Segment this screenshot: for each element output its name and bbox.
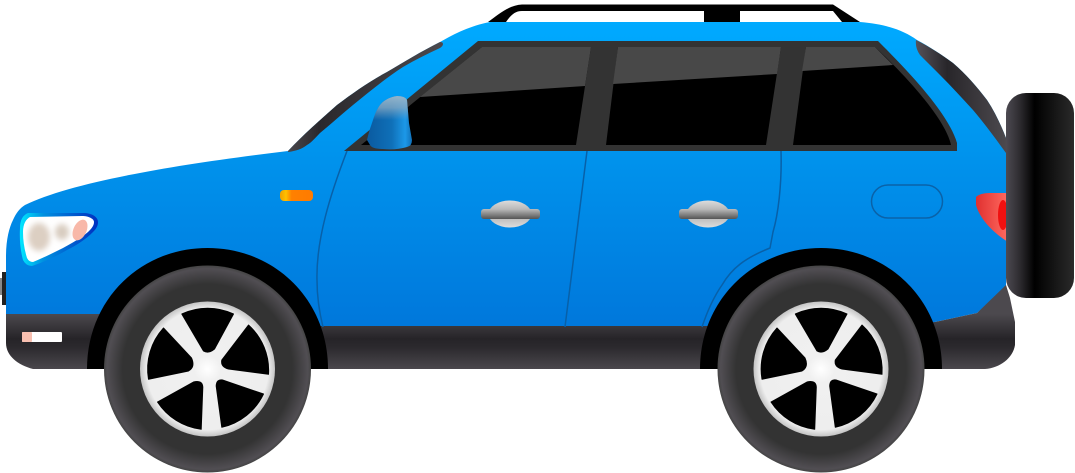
A-pillar dark strip (288, 42, 443, 152)
rear pillar dark strip (916, 40, 1006, 153)
lower trim rear bumper (900, 285, 1015, 369)
side indicator (280, 190, 313, 201)
rear wheel (718, 266, 924, 472)
middle window (606, 47, 781, 145)
lower trim front (6, 314, 110, 369)
front door handle (481, 200, 540, 228)
rear wheel arch (700, 248, 942, 369)
window frame (344, 41, 957, 151)
door seams (317, 151, 781, 327)
front bumper bracket (0, 272, 6, 305)
spare wheel (1006, 93, 1074, 298)
lower trim side (300, 326, 720, 369)
front window (361, 47, 591, 145)
wing mirror (367, 96, 412, 149)
front wheel arch (87, 248, 328, 369)
fuel door (872, 185, 942, 218)
headlight (20, 213, 98, 266)
rear door handle (679, 200, 738, 228)
tail light (976, 193, 1008, 242)
fog light (22, 332, 62, 342)
roof rack (488, 4, 860, 23)
front wheel (104, 266, 311, 472)
car body (6, 22, 1006, 340)
rear window (793, 47, 951, 145)
